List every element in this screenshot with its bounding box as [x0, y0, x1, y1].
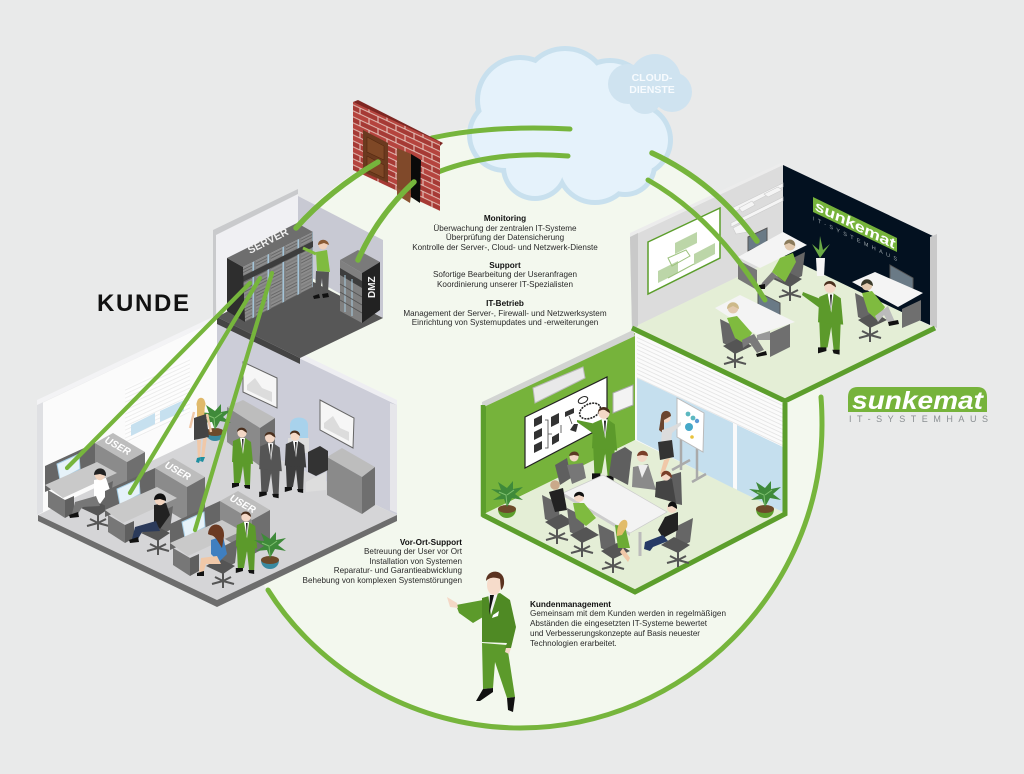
text block: monitoring support operations: IT-Betrieb [486, 299, 524, 308]
firewall brick wall [353, 100, 443, 211]
character: account manager [447, 572, 516, 712]
text block: monitoring support operations: Sofortige Bearbeitung der Useranfragen [433, 270, 577, 279]
green circular connection arc [268, 397, 822, 728]
text block: account management: Abständen die eingesetzten IT-Systeme bewertet [530, 619, 708, 628]
desk 1 [738, 228, 807, 301]
front row chairs and people [542, 480, 693, 573]
plant left [491, 481, 523, 518]
flipchart [672, 398, 706, 482]
logo: sunkemat: sunkemat [852, 387, 985, 415]
plant back [199, 404, 231, 441]
text block: account management: Gemeinsam mit dem Kunden werden in regelmäßigen [530, 609, 726, 618]
text block: monitoring support operations: Kontrolle der Server-, Cloud- und Netzwerk-Dienste [412, 243, 598, 252]
logo: sunkemat [848, 387, 988, 424]
staff member in green suit [232, 428, 253, 489]
workstation 3 [170, 491, 270, 588]
wall logo: IT-SYSTEMHAUS [813, 216, 897, 263]
shelves [731, 183, 783, 234]
workstation 1: USER [103, 435, 133, 458]
text block: monitoring support operations: Koordinierung unserer IT-Spezialisten [437, 280, 573, 289]
plant right [749, 481, 781, 518]
water cooler [288, 418, 309, 453]
support technician [236, 511, 257, 574]
text block: on-site support: Vor-Ort-Support [400, 538, 462, 547]
text block: monitoring support operations: Monitoring [484, 214, 526, 223]
door closed [363, 130, 388, 183]
woman presenting [658, 411, 681, 474]
green links from firewall to cloud [432, 128, 570, 172]
left floor border [483, 405, 635, 592]
consultant in green suit [802, 281, 843, 355]
desk 3 [852, 265, 923, 342]
text block: monitoring support operations: Überwachung der zentralen IT-Systeme [433, 223, 577, 233]
conference table [563, 475, 667, 556]
coffee machine [306, 446, 328, 492]
wall logo: sunkemat [815, 198, 896, 253]
cloud services badge: CLOUD- [632, 72, 673, 84]
green floor border [483, 403, 785, 592]
man in grey suit [259, 432, 282, 498]
text block: account management: Technologien erarbeitet. [530, 639, 617, 648]
text block: on-site support: Betreuung der User vor Ort [364, 547, 463, 556]
wall pictures [243, 362, 354, 448]
text block: monitoring support operations: Management der Server-, Firewall- und Netzwerksystem [403, 309, 607, 318]
plant front [254, 532, 286, 569]
cloud [467, 46, 692, 205]
panel: service desk room [630, 162, 937, 401]
presenter in green suit [577, 407, 617, 481]
cloud services badge: DIENSTE [629, 84, 675, 96]
door open [397, 148, 421, 203]
text block: monitoring support operations: Einrichtung von Systemupdates und -erweiterungen [412, 318, 598, 327]
panel: user office room [37, 313, 397, 607]
whiteboard with network diagram [525, 377, 607, 468]
text block: account management [530, 600, 726, 648]
man in dark suit [285, 430, 306, 493]
workstation 2: USER [163, 460, 193, 483]
panel: server room [213, 189, 383, 364]
text block: monitoring support operations: Überprüfung der Datensicherung [446, 232, 564, 242]
green links from cloud to service desk [648, 153, 765, 300]
text block: monitoring support operations [403, 214, 607, 327]
blinds and windows [637, 336, 783, 512]
window with blinds [125, 357, 190, 444]
text block: account management: und Verbesserungskonzepte auf Basis neuester [530, 629, 700, 638]
text block: monitoring support operations: Support [489, 261, 521, 270]
green links from firewall to server room [296, 162, 414, 260]
workstation 1 [45, 433, 145, 530]
workstation 2 [105, 458, 205, 555]
desk 2 [715, 292, 795, 368]
text block: on-site support: Installation von Systemen [369, 557, 462, 566]
text block: on-site support [303, 538, 463, 585]
heading: KUNDE: KUNDE [97, 290, 189, 317]
server rack: SERVER [246, 226, 291, 257]
back row chairs and people [555, 447, 682, 505]
potted plant [812, 236, 830, 276]
logo: sunkemat: IT-SYSTEMHAUS [849, 414, 988, 424]
green links from server to user workstations [67, 273, 272, 530]
woman standing [190, 398, 211, 463]
cloud services badge [608, 54, 692, 114]
small wall picture [613, 385, 633, 413]
server rack [227, 223, 313, 322]
back cabinet [227, 400, 275, 466]
text block: on-site support: Behebung von komplexen Systemstörungen [303, 576, 462, 585]
process diagram board [648, 208, 720, 294]
right cabinet [327, 448, 375, 514]
air conditioner [533, 367, 585, 403]
DMZ rack [340, 250, 380, 323]
pale green circle zone [218, 124, 822, 728]
text block: account management: Kundenmanagement [530, 600, 611, 609]
panel: meeting room [482, 330, 785, 593]
text block: on-site support: Reparatur- und Garantieabwicklung [334, 566, 462, 575]
DMZ rack: DMZ [367, 276, 378, 298]
technician [303, 240, 330, 299]
workstation 3: USER [228, 493, 258, 516]
